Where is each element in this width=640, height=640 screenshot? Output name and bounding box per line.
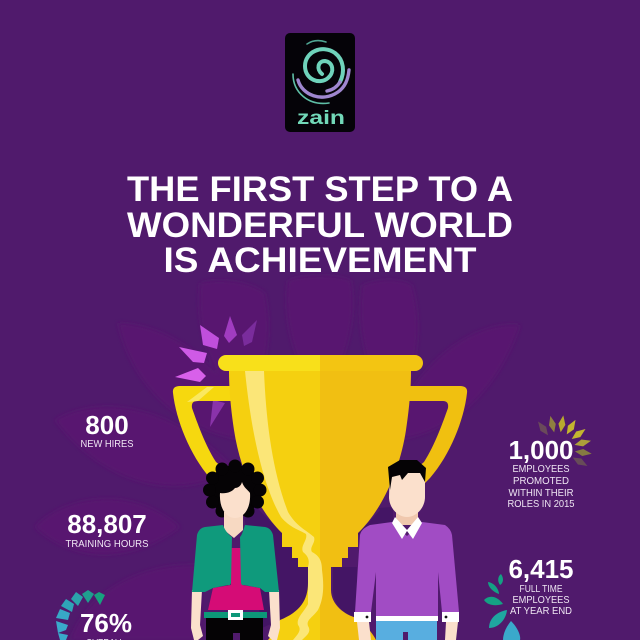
trophy cup right half: [320, 371, 411, 640]
stat: full time employees: AT YEAR END: [510, 605, 572, 617]
stat: new hires: 800: [85, 410, 129, 440]
woman belt: [204, 610, 267, 620]
stat: training hours: TRAINING HOURS: [66, 538, 148, 550]
icon: olive sunburst: [535, 415, 592, 469]
stat: training hours: 88,807: [67, 509, 147, 539]
trophy right handle: [405, 386, 467, 490]
woman: [191, 460, 280, 640]
man waistband: [376, 616, 438, 621]
man hands: [357, 622, 458, 640]
trophy rim: [218, 355, 320, 371]
man neck: [396, 505, 418, 525]
woman trousers: [206, 618, 263, 640]
woman jacket: [192, 525, 232, 592]
trophy cup left half: [229, 371, 320, 640]
trophy: [173, 355, 467, 640]
title: IS ACHIEVEMENT: [164, 241, 476, 280]
woman hair: [203, 460, 266, 518]
title: [127, 170, 513, 280]
stat: full time employees: 6,415: [508, 554, 574, 584]
stat: overall: 76%: [80, 608, 132, 638]
man: [354, 460, 459, 640]
logo: zain: [285, 33, 355, 132]
man face: [389, 468, 425, 517]
title: THE FIRST STEP TO A: [127, 170, 513, 209]
stat: employees promoted: EMPLOYEES: [512, 463, 570, 475]
stat: new hires: [80, 410, 134, 450]
stat: full time employees: [508, 554, 574, 617]
background flower petals: [35, 276, 520, 640]
icon: teal leaves: [484, 574, 520, 640]
man collar: [392, 517, 422, 539]
stat: employees promoted: 1,000: [508, 435, 574, 465]
stat: employees promoted: ROLES IN 2015: [508, 498, 575, 510]
trophy highlight: [245, 371, 323, 640]
woman neck: [224, 512, 243, 538]
stat: employees promoted: [508, 435, 575, 510]
stat: employees promoted: PROMOTED: [513, 475, 569, 487]
icon: progress ring: [56, 590, 105, 640]
man legs: [376, 620, 437, 640]
trophy shadow: [240, 490, 393, 628]
man cuffs: [354, 612, 459, 622]
woman top: [208, 548, 264, 610]
icon: magenta sparkle: [175, 316, 257, 427]
trophy left handle: [173, 386, 235, 490]
stat: full time employees: EMPLOYEES: [512, 594, 570, 606]
logo wordmark: zain: [297, 108, 345, 129]
woman arms: [191, 590, 280, 640]
man sweater: [355, 522, 459, 618]
stat: employees promoted: WITHIN THEIR: [508, 487, 574, 499]
stat: full time employees: FULL TIME: [520, 583, 562, 595]
woman face: [220, 482, 250, 518]
title: WONDERFUL WORLD: [127, 206, 513, 245]
logo swirl: [293, 41, 349, 103]
man hair: [388, 460, 426, 490]
stat: new hires: NEW HIRES: [80, 438, 134, 450]
